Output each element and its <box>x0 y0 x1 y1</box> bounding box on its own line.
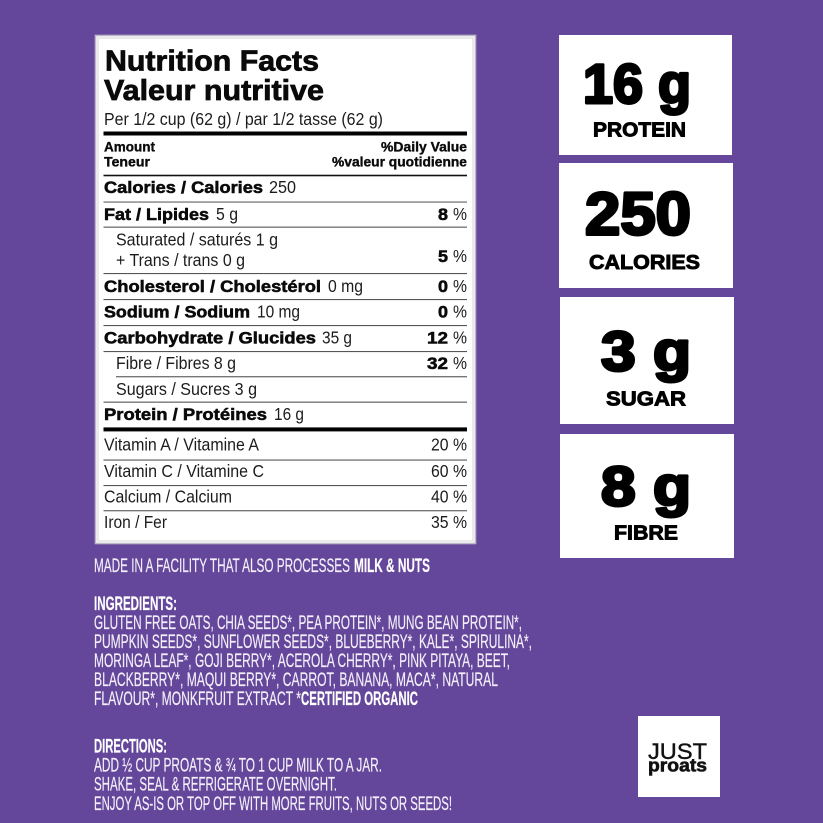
logo: just proats: proats <box>648 754 707 776</box>
logo: just proats: JUST <box>648 739 707 764</box>
row: carbohydrate <box>104 328 467 352</box>
stat card: protein: 16 g <box>583 52 691 115</box>
row: vitamin c <box>104 461 467 486</box>
row: carbohydrate: Carbohydrate / Glucides <box>104 328 316 348</box>
row: fibre: % <box>453 353 467 373</box>
row: fibre: 32 <box>427 354 448 373</box>
stat card: protein: PROTEIN <box>593 118 686 142</box>
heading: nutrition facts: Nutrition Facts <box>105 46 319 78</box>
column headers: %valeur quotidienne <box>332 154 467 170</box>
serving size: Per 1/2 cup (62 g) / par 1/2 tasse (62 g) <box>104 109 383 129</box>
allergen note: MADE IN A FACILITY THAT ALSO PROCESSES <box>94 556 350 577</box>
row: cholesterol: Cholesterol / Cholestérol <box>104 277 321 296</box>
heading: nutrition facts <box>104 46 324 107</box>
stat card: sugar <box>560 297 734 424</box>
row: cholesterol: % <box>453 276 467 296</box>
ingredients: MORINGA LEAF*, GOJI BERRY*, ACEROLA CHERRY*, PINK PITAYA, BEET, <box>94 651 510 672</box>
column headers: %Daily Value <box>381 140 468 154</box>
row: saturated and trans: % <box>453 246 467 266</box>
ingredients: PUMPKIN SEEDS*, SUNFLOWER SEEDS*, BLUEBERRY*, KALE*, SPIRULINA*, <box>94 632 532 653</box>
stat card: calories <box>559 163 733 288</box>
ingredients: CERTIFIED ORGANIC <box>301 689 418 710</box>
stat card: fibre <box>560 434 734 558</box>
row: calories: Calories / Calories <box>104 178 263 197</box>
logo: just proats <box>638 716 720 797</box>
stat card: sugar: 3 g <box>601 320 691 382</box>
directions: ENJOY AS-IS OR TOP OFF WITH MORE FRUITS, NUTS OR SEEDS! <box>94 794 452 815</box>
ingredients: FLAVOUR*, MONKFRUIT EXTRACT * <box>94 689 301 710</box>
row: vitamin c: Vitamin C / Vitamine C <box>104 461 264 481</box>
row: sodium: 0 <box>438 302 448 322</box>
directions <box>94 736 452 815</box>
row: fibre: Fibre / Fibres 8 g <box>116 353 236 373</box>
row: fat: 8 <box>438 205 448 224</box>
stat card: fibre: FIBRE <box>614 522 678 544</box>
row: fat: Fat / Lipides <box>104 205 209 224</box>
stat card: calories: 250 <box>585 180 691 248</box>
row: vitamin a: 20 % <box>431 434 467 454</box>
row: sodium <box>104 302 467 326</box>
row: saturated and trans: 5 <box>438 247 448 266</box>
row: fat: % <box>453 204 467 224</box>
directions: SHAKE, SEAL & REFRIGERATE OVERNIGHT. <box>94 774 337 796</box>
stat card: fibre: 8 g <box>601 454 691 518</box>
ingredients <box>94 594 532 710</box>
directions: ADD ½ CUP PROATS & ¾ TO 1 CUP MILK TO A JAR. <box>94 756 382 776</box>
panel: nutrition facts table <box>96 36 476 544</box>
ingredients: INGREDIENTS: <box>94 594 177 615</box>
row: calories <box>104 177 467 203</box>
row: saturated and trans: + Trans / trans 0 g <box>116 250 245 270</box>
row: calcium: Calcium / Calcium <box>104 486 232 506</box>
row: fibre <box>116 353 467 377</box>
ingredients: GLUTEN FREE OATS, CHIA SEEDS*, PEA PROTEIN*, MUNG BEAN PROTEIN*, <box>94 613 522 634</box>
row: calories: 250 <box>269 177 296 197</box>
row: sodium: 10 mg <box>257 302 300 322</box>
stat card: calories: CALORIES <box>589 251 700 274</box>
row: saturated and trans <box>104 230 467 274</box>
row: cholesterol: 0 <box>438 277 448 296</box>
row: carbohydrate: 35 g <box>322 328 352 348</box>
row: iron <box>104 512 467 532</box>
column headers: Teneur <box>104 154 151 170</box>
row: sodium: % <box>453 302 467 322</box>
row: protein <box>104 404 467 431</box>
row: carbohydrate: 12 <box>427 328 448 348</box>
row: vitamin a: Vitamin A / Vitamine A <box>104 434 259 454</box>
row: calcium <box>104 486 467 511</box>
stat card: sugar: SUGAR <box>606 388 686 410</box>
directions: DIRECTIONS: <box>94 736 167 758</box>
allergen note: MILK & NUTS <box>354 556 430 577</box>
row: iron: Iron / Fer <box>104 512 167 532</box>
row: fat <box>104 204 467 228</box>
row: carbohydrate: % <box>453 328 467 348</box>
row: fat: 5 g <box>216 204 238 224</box>
row: calcium: 40 % <box>431 486 467 506</box>
row: iron: 35 % <box>431 512 467 532</box>
row: cholesterol <box>104 276 467 300</box>
row: vitamin c: 60 % <box>431 461 467 481</box>
row: sugars: Sugars / Sucres 3 g <box>116 379 257 399</box>
row: protein: 16 g <box>274 404 304 424</box>
row: protein: Protein / Protéines <box>104 405 267 424</box>
ingredients: BLACKBERRY*, MAQUI BERRY*, CARROT, BANANA, MACA*, NATURAL <box>94 670 498 691</box>
row: vitamin a <box>104 434 467 461</box>
row: sodium: Sodium / Sodium <box>104 302 250 322</box>
stat card: protein <box>559 35 732 155</box>
row: saturated and trans: Saturated / saturés 1 g <box>116 230 278 250</box>
column headers: Amount <box>104 140 155 154</box>
row: cholesterol: 0 mg <box>328 276 363 296</box>
heading: nutrition facts: Valeur nutritive <box>104 75 324 107</box>
column headers <box>104 132 468 176</box>
